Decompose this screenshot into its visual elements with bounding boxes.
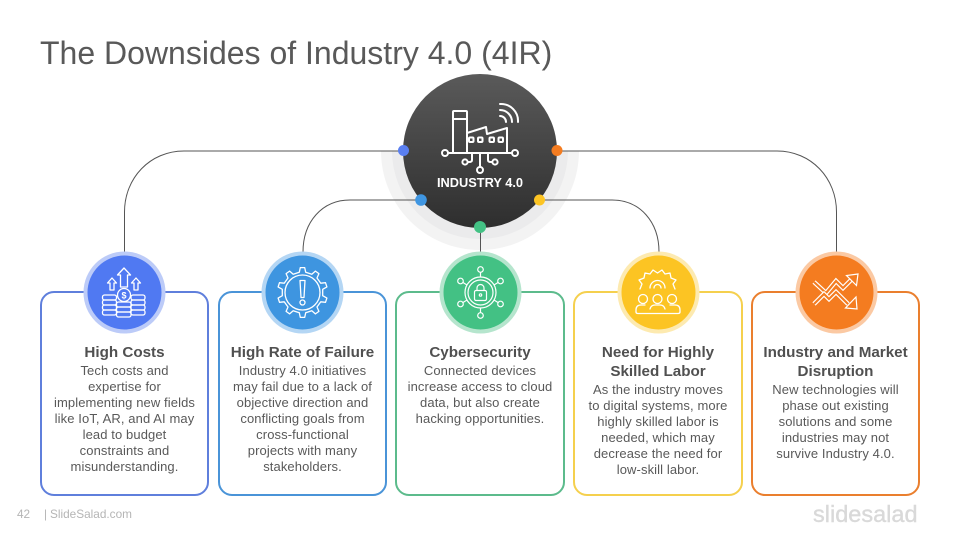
footer: page number and site: | [44,507,47,521]
text: Cybersecurity: Connected devices [424,363,536,378]
icon circle: High Costs: $ [121,290,127,300]
text: High Rate of Failure: cross-functional [256,427,349,442]
text: High Rate of Failure: objective direction and [237,395,368,410]
text: Industry and Market Disruption: Disruption [798,363,873,380]
central hub circle [403,74,557,228]
text: Need for Highly Skilled Labor: Skilled Labor [610,363,706,380]
text: High Costs [54,344,195,474]
text: Need for Highly Skilled Labor: to digital systems, more [589,398,727,413]
panel: Cybersecurity card [395,291,565,496]
text: Cybersecurity: Cybersecurity [429,344,531,361]
icon circle: High Costs [84,252,166,334]
text: High Rate of Failure: Industry 4.0 initiatives [239,363,366,378]
text: Need for Highly Skilled Labor: low-skill labor. [617,462,699,477]
text: High Costs: High Costs [84,344,165,361]
text: High Rate of Failure: High Rate of Failure [231,344,374,361]
connector lines [124,151,836,254]
text: High Rate of Failure: may fail due to a lack of [233,379,372,394]
text: High Costs: constraints and [80,443,169,458]
footer: page number and site: 42 [17,507,30,521]
text: Cybersecurity [408,344,552,426]
text: High Costs: lead to budget [83,427,166,442]
text: Cybersecurity: data, but also create [420,395,540,410]
text: High Rate of Failure: conflicting goals from [240,411,365,426]
footer: logo wordmark: slidesalad [813,501,918,527]
icon: smart factory [442,104,518,173]
footer: page number and site: SlideSalad.com [50,507,132,521]
text: Industry and Market Disruption: phase out existing [782,398,889,413]
text: High Costs: Tech costs and [80,363,169,378]
text: High Rate of Failure: projects with many [248,443,357,458]
text: Need for Highly Skilled Labor: needed, which may [601,430,715,445]
central hub halo [381,151,579,250]
icon circle: Industry and Market Disruption [796,252,878,334]
icon circle: Need for Highly Skilled Labor [618,252,700,334]
icon circle: High Rate of Failure [262,252,344,334]
panel: High Rate of Failure card [218,291,387,496]
title: The Downsides of Industry 4.0 (4IR) [40,35,552,71]
text: Industry and Market Disruption [763,344,908,461]
icon circle: Cybersecurity [440,252,522,334]
text: Cybersecurity: increase access to cloud [408,379,552,394]
text: High Costs: expertise for [88,379,161,394]
hub label: INDUSTRY 4.0 [437,175,523,190]
text: Need for Highly Skilled Labor: Need for Highly [602,344,714,361]
panel: Industry and Market Disruption card [751,291,920,496]
panel: High Costs card [40,291,209,496]
text: Need for Highly Skilled Labor [588,344,727,477]
text: High Costs: like IoT, AR, and AI may [55,411,194,426]
text: Need for Highly Skilled Labor: highly skilled labor is [597,414,719,429]
text: Need for Highly Skilled Labor: As the industry moves [593,382,723,397]
text: High Costs: misunderstanding. [71,459,178,474]
text: Industry and Market Disruption: Industry and Market [763,344,908,361]
text: Industry and Market Disruption: survive Industry 4.0. [776,446,895,461]
connector dots [398,145,562,233]
text: Industry and Market Disruption: New technologies will [772,382,899,397]
text: Industry and Market Disruption: solutions and some [779,414,892,429]
text: High Costs: implementing new fields [54,395,195,410]
panel: Need for Highly Skilled Labor card [573,291,743,496]
text: Need for Highly Skilled Labor: decrease the need for [594,446,722,461]
text: High Rate of Failure: stakeholders. [263,459,342,474]
text: Industry and Market Disruption: industries may not [782,430,889,445]
text: High Rate of Failure [231,344,374,474]
text: Cybersecurity: hacking opportunities. [416,411,544,426]
